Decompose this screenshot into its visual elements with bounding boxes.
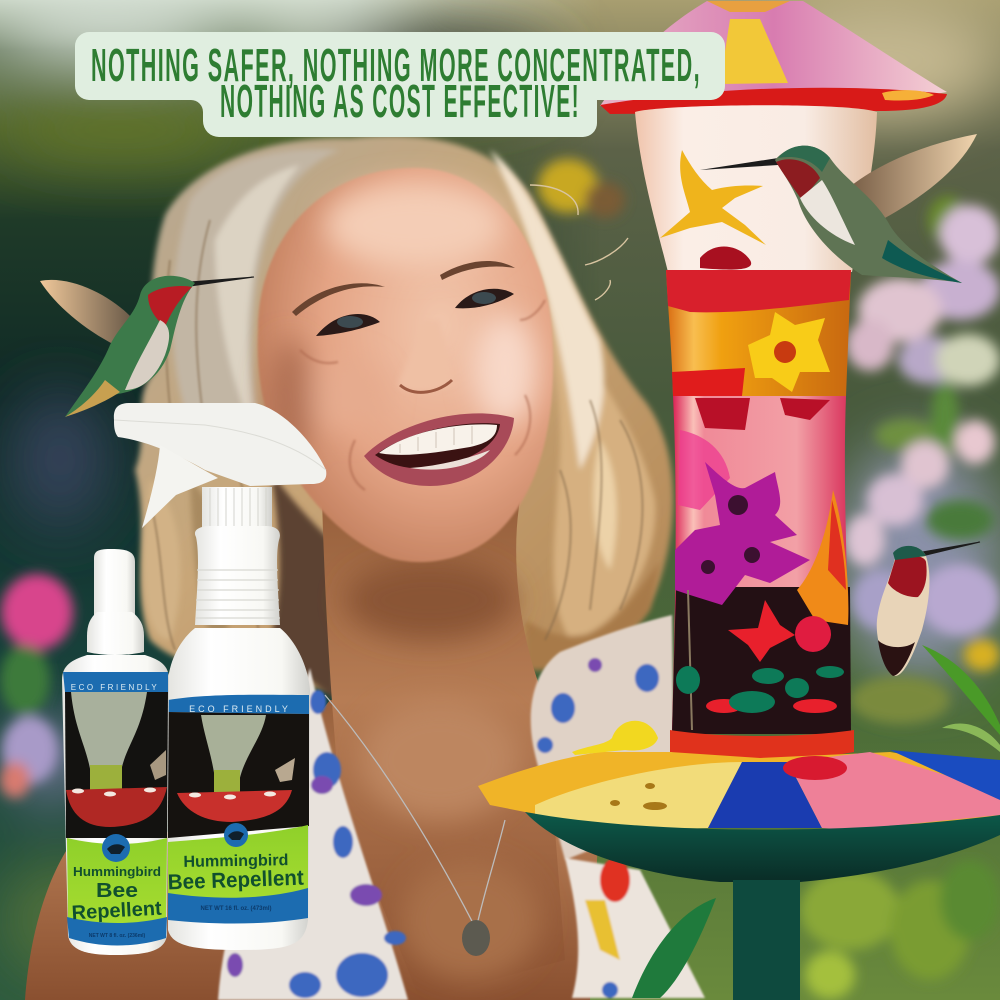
neck thread xyxy=(196,570,280,618)
eco friendly text: ECO FRIENDLY xyxy=(71,683,159,692)
mist cap xyxy=(94,549,135,618)
tray xyxy=(478,721,1000,830)
bird badge xyxy=(102,834,130,862)
forehead and cheek glow xyxy=(268,183,537,460)
large spray bottle xyxy=(114,403,326,950)
pole xyxy=(733,880,800,1000)
yellow flower xyxy=(748,312,830,392)
green label panel xyxy=(168,825,308,904)
highlight stem xyxy=(688,590,692,730)
collar xyxy=(202,487,272,527)
orange flower right xyxy=(797,490,848,625)
green leaves xyxy=(676,666,844,713)
hair back xyxy=(135,136,673,690)
blue eco band xyxy=(168,695,309,714)
blue bottom band xyxy=(168,888,308,924)
label feeder image xyxy=(177,715,295,822)
small spray bottle xyxy=(62,549,169,955)
product name xyxy=(71,864,163,924)
right eyebrow xyxy=(440,261,515,280)
liquid band pink xyxy=(672,396,850,730)
red flower top xyxy=(700,246,751,270)
body xyxy=(62,655,169,955)
mouth xyxy=(364,413,514,486)
necklace xyxy=(325,695,505,956)
headline banner xyxy=(75,32,725,137)
green dish xyxy=(525,812,1000,882)
blue bottom band xyxy=(67,917,167,946)
left eye xyxy=(316,314,380,336)
hummingbird feeder xyxy=(478,1,1000,1000)
banner shape xyxy=(75,32,725,137)
hummingbird top right xyxy=(700,134,977,283)
label photo xyxy=(168,712,309,838)
dark lower liquid xyxy=(672,587,851,734)
neck xyxy=(322,500,565,1000)
collar xyxy=(87,612,144,655)
red flowers lower xyxy=(706,600,837,713)
red reflection at band bottom xyxy=(672,368,745,396)
magenta flowers xyxy=(675,430,810,605)
dress xyxy=(218,615,705,1000)
product name: Hummingbird xyxy=(73,864,161,879)
headline text xyxy=(91,39,701,127)
net weight: NET WT 16 fl. oz. (473ml) xyxy=(200,906,272,912)
hummingbird left xyxy=(40,276,254,417)
product name: Bee xyxy=(96,880,138,902)
bird badge xyxy=(224,823,248,847)
product name: Bee Repellent xyxy=(167,866,304,894)
liquid band red top xyxy=(666,270,851,312)
hair strands xyxy=(150,220,642,650)
feeder roof xyxy=(600,1,947,114)
top glass reservoir xyxy=(635,105,877,272)
liquid band orange xyxy=(666,270,851,396)
smile lines xyxy=(300,300,545,490)
hummingbird right xyxy=(877,542,980,676)
label feeder image xyxy=(66,692,167,827)
neck shading xyxy=(345,560,540,980)
base ring xyxy=(670,730,854,760)
shoulders and chest xyxy=(25,700,600,1000)
neck xyxy=(195,526,280,625)
face xyxy=(258,168,553,562)
silhouette bird on glass xyxy=(660,150,766,245)
blue eco band xyxy=(63,672,168,692)
product name: Repellent xyxy=(71,898,163,924)
flyaway hair strands xyxy=(530,185,628,300)
body xyxy=(168,628,310,950)
foreground leaves xyxy=(632,645,1000,998)
green label panel xyxy=(67,838,167,924)
nose xyxy=(398,320,453,392)
product name xyxy=(167,852,304,894)
headline text: NOTHING AS COST EFFECTIVE! xyxy=(220,75,580,127)
eco friendly text: ECO FRIENDLY xyxy=(189,704,291,714)
label photo xyxy=(65,692,168,838)
woman xyxy=(25,136,705,1000)
product name: Hummingbird xyxy=(183,852,289,871)
right eye xyxy=(455,289,514,308)
hair highlights xyxy=(144,149,660,700)
left eyebrow xyxy=(292,283,385,316)
trigger sprayer xyxy=(114,403,326,528)
red band at divider xyxy=(695,398,830,430)
net weight: NET WT 8 fl. oz. (236ml) xyxy=(89,933,146,939)
